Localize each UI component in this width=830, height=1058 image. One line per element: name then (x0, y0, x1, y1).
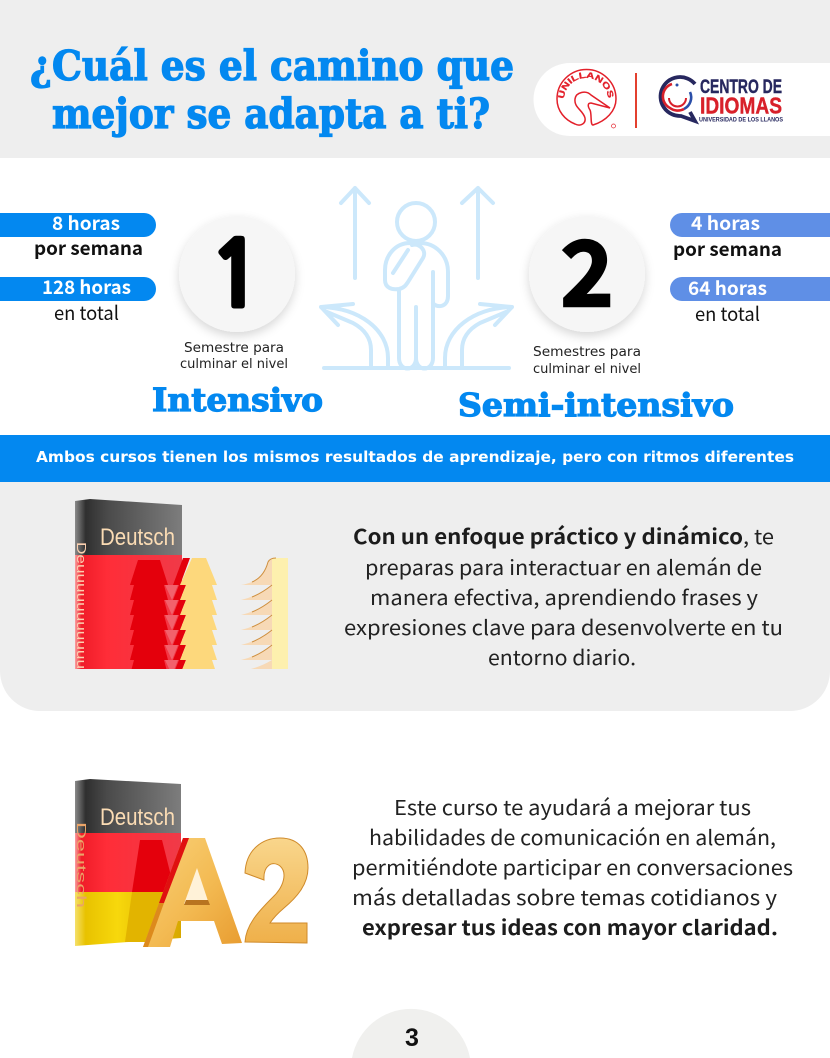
image: German book with clipped golden letters: Deutsch (100, 524, 175, 551)
pill: 4 horas (670, 209, 830, 237)
badge: 2 semestres: 2 (560, 202, 614, 332)
caption: 2 semestres (533, 345, 641, 377)
title (30, 42, 514, 138)
heading: Intensivo: Intensivo (152, 381, 323, 419)
panel: right hours (670, 209, 830, 327)
text: A2 description: Este curso te ayudará a mejorar tus (394, 791, 751, 821)
caption: 2 semestres: culminar el nivel (533, 362, 641, 377)
logo: Unillanos (556, 68, 617, 128)
caption: 2 semestres: Semestres para (533, 345, 641, 360)
pill: 8 horas (0, 209, 156, 237)
logo: Centro de Idiomas: CENTRO DE (700, 77, 782, 98)
pill: 64 horas: 64 horas (688, 274, 767, 301)
caption: 1 semestre (180, 341, 288, 372)
text: A1 description: expresiones clave para desenvolverte en tu (344, 611, 783, 641)
text: en total: en total (54, 299, 119, 326)
text: A1 description: manera efectiva, aprendiendo frases y (370, 581, 758, 611)
text: A2 description: expresar tus ideas con mayor claridad. (362, 911, 778, 941)
panel: grey A1 section (0, 482, 830, 711)
text: A2 description (352, 791, 793, 941)
logo: Centro de Idiomas: UNIVERSIDAD DE LOS LLANOS (699, 118, 783, 124)
text: A1 description (344, 520, 783, 671)
badge: 1 semestre (179, 216, 295, 332)
image: German book with golden A2: Deutsch (100, 804, 175, 831)
title: mejor se adapta a ti? (52, 90, 490, 138)
heading: Semi-intensivo: Semi-intensivo (458, 386, 734, 424)
text: A1 description: Con un enfoque práctico y dinámico (353, 520, 743, 550)
text: A2 description: habilidades de comunicación en alemán, (369, 821, 776, 851)
text: por semana: por semana (34, 234, 143, 261)
pill: 8 horas: 8 horas (52, 209, 120, 236)
logo pill (534, 63, 830, 136)
text: por semana: por semana (673, 235, 782, 262)
text: en total: en total (695, 300, 760, 327)
text: A1 description: entorno diario. (488, 641, 636, 671)
caption: 1 semestre: Semestre para (184, 341, 284, 356)
image: German book with golden A2: Deutsch (74, 822, 89, 908)
badge: 2 semestres (529, 202, 645, 332)
banner (0, 435, 830, 482)
icon: person choosing paths (321, 188, 512, 368)
page number (352, 1009, 470, 1058)
pill: 128 horas: 128 horas (42, 273, 131, 300)
text: A2 description: más detalladas sobre temas cotidianos y (352, 881, 777, 911)
pill: 64 horas (670, 274, 830, 301)
image: German book with golden A2 (74, 779, 308, 947)
header band (0, 0, 830, 158)
logo: Centro de Idiomas: IDIOMAS (700, 92, 782, 118)
page number: 3 (405, 1024, 419, 1052)
pill: 4 horas: 4 horas (691, 209, 760, 236)
image: German book with clipped golden letters: Deuuuuuuuuuuu (74, 542, 89, 669)
logo: Unillanos: UNILLANOS (558, 72, 614, 98)
text: A1 description: , te (743, 520, 774, 550)
text: A1 description: preparas para interactuar en alemán de (365, 551, 762, 581)
banner: Ambos cursos tienen los mismos resultados de aprendizaje, pero con ritmos diferentes (36, 448, 794, 466)
pill: 128 horas (0, 273, 156, 301)
image: German book with clipped golden letters (74, 499, 288, 675)
title: ¿Cuál es el camino que (30, 42, 514, 90)
logo divider (635, 73, 637, 128)
badge: 1 semestre: 1 (209, 231, 263, 320)
caption: 1 semestre: culminar el nivel (180, 357, 288, 372)
text: A2 description: permitiéndote participar en conversaciones (352, 851, 793, 881)
logo: Centro de Idiomas (661, 77, 783, 124)
panel: left hours (0, 209, 156, 326)
